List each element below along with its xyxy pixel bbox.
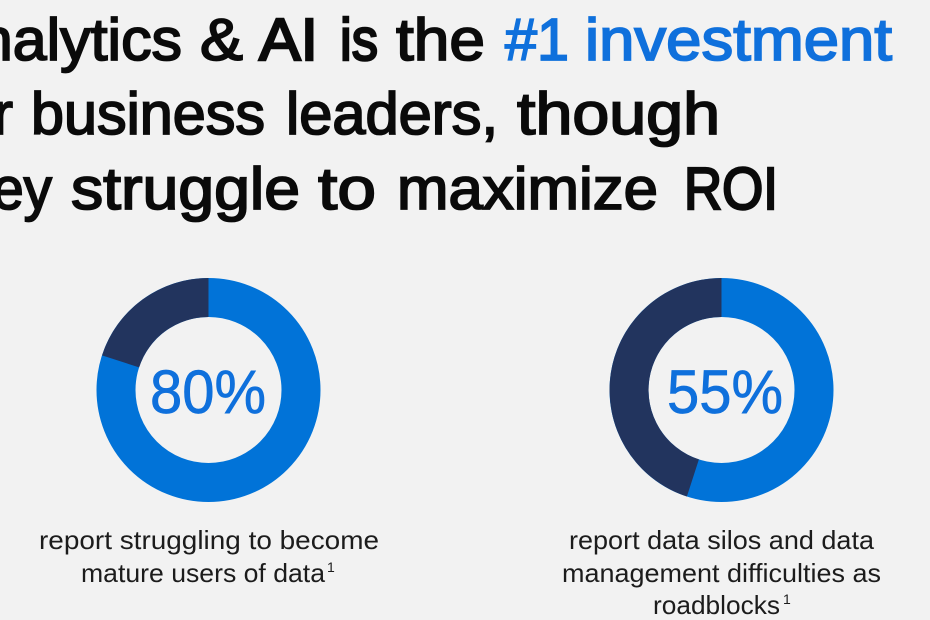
- stat value: 80%: 80%: [150, 358, 266, 426]
- caption: 55% stat: 1: [783, 591, 791, 607]
- panel: 80% stat: [39, 278, 379, 588]
- caption: 55% stat: report data silos and data: [569, 525, 875, 555]
- title: business: [31, 81, 265, 147]
- stat value: 55%: 55%: [667, 358, 783, 426]
- title: the: [396, 7, 485, 73]
- title: maximize: [397, 156, 658, 222]
- panel: 55% stat: [562, 278, 881, 620]
- title: though: [517, 81, 720, 147]
- title: is: [340, 7, 378, 73]
- caption: 80% stat: 1: [327, 559, 335, 575]
- donut chart: 55%: [610, 278, 814, 496]
- title: &: [200, 7, 243, 73]
- caption: 55% stat: [562, 525, 881, 620]
- caption: 55% stat: management difficulties as: [562, 558, 881, 588]
- title: to: [318, 156, 376, 222]
- title: struggle: [71, 156, 300, 222]
- title: ROI: [684, 156, 778, 222]
- title: #1: [505, 7, 569, 73]
- caption: 80% stat: mature users of data: [81, 558, 326, 588]
- title: investment: [585, 7, 892, 73]
- title: AI: [259, 7, 318, 73]
- title: [0, 7, 892, 222]
- caption: 80% stat: [39, 525, 379, 588]
- title: leaders,: [286, 81, 498, 147]
- caption: 55% stat: roadblocks: [653, 590, 780, 620]
- caption: 80% stat: report struggling to become: [39, 525, 379, 555]
- donut chart: 80%: [102, 278, 301, 482]
